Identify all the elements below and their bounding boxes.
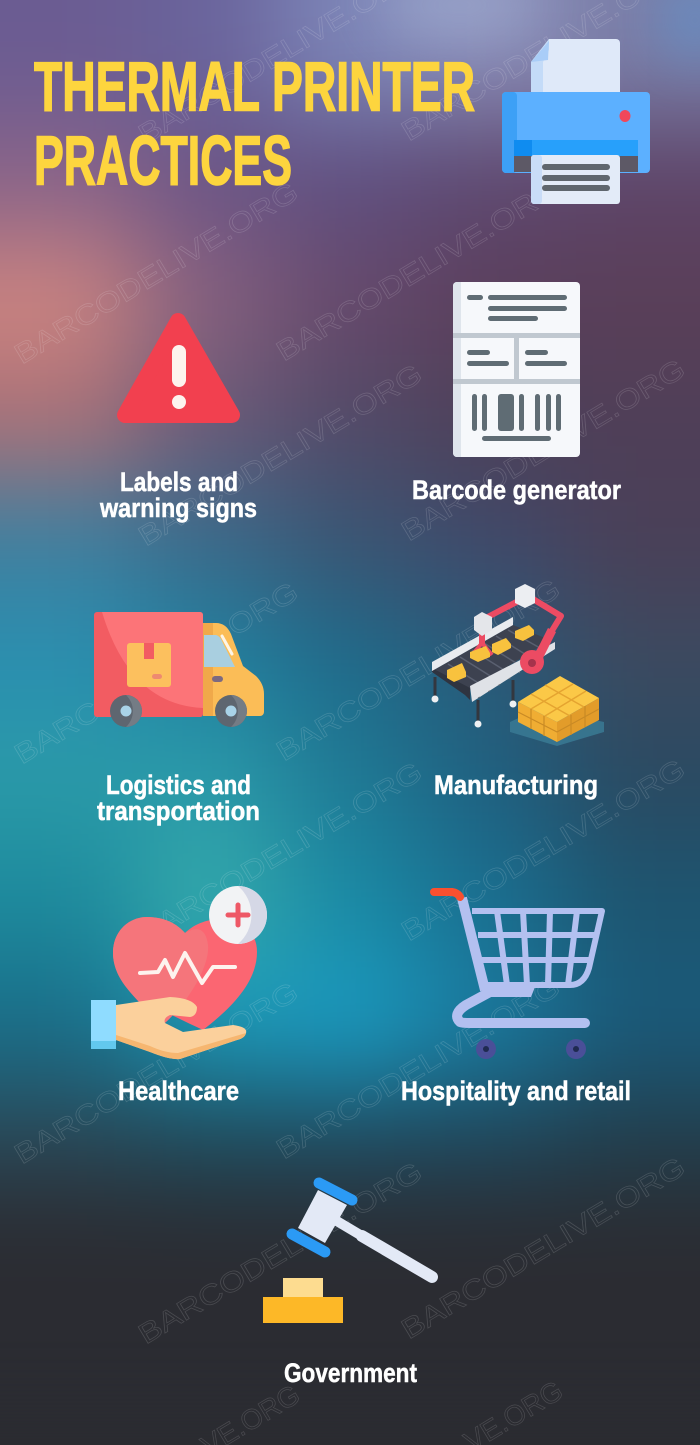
label: government: Government xyxy=(284,1358,417,1388)
label: labels and warning signs: Labels and xyxy=(120,467,238,497)
watermarks: BARCODELIVE.ORG xyxy=(133,358,427,552)
label: barcode generator: Barcode generator xyxy=(412,475,621,505)
icon: printer xyxy=(502,39,650,204)
watermarks: BARCODELIVE.ORG xyxy=(9,176,303,370)
label: healthcare: Healthcare xyxy=(118,1076,239,1106)
label: logistics and transportation xyxy=(97,770,260,826)
watermarks: BARCODELIVE.ORG xyxy=(396,1151,690,1345)
label: logistics and transportation: Logistics and xyxy=(106,770,251,800)
watermarks: BARCODELIVE.ORG xyxy=(396,353,690,547)
icon: gavel xyxy=(263,1183,432,1323)
label: labels and warning signs xyxy=(99,467,257,523)
icon: shopping cart xyxy=(434,892,602,1059)
title xyxy=(34,48,475,200)
watermarks: BARCODELIVE.ORG xyxy=(9,976,303,1170)
icon: warning triangle xyxy=(125,321,232,415)
watermarks: BARCODELIVE.ORG xyxy=(271,971,565,1165)
label: hospitality and retail: Hospitality and retail xyxy=(401,1076,631,1106)
icon: shipping label xyxy=(453,282,580,457)
label: manufacturing: Manufacturing xyxy=(434,770,598,800)
icon: heart in hand xyxy=(91,886,267,1059)
label: logistics and transportation: transportation xyxy=(97,796,260,826)
watermarks: BARCODELIVE.ORG xyxy=(133,1156,427,1350)
title: THERMAL PRINTER xyxy=(34,48,475,126)
watermarks: BARCODELIVE.ORG xyxy=(133,756,427,950)
watermarks: BARCODELIVE.ORG xyxy=(271,573,565,767)
watermarks: BARCODELIVE.ORG xyxy=(396,753,690,947)
icon: delivery truck xyxy=(94,612,264,727)
watermarks: BARCODELIVE.ORG xyxy=(271,173,565,367)
title: PRACTICES xyxy=(34,122,292,200)
label: labels and warning signs: warning signs xyxy=(99,493,257,523)
watermarks: BARCODELIVE.ORG xyxy=(9,576,303,770)
icon: conveyor robot and boxes xyxy=(432,584,604,746)
